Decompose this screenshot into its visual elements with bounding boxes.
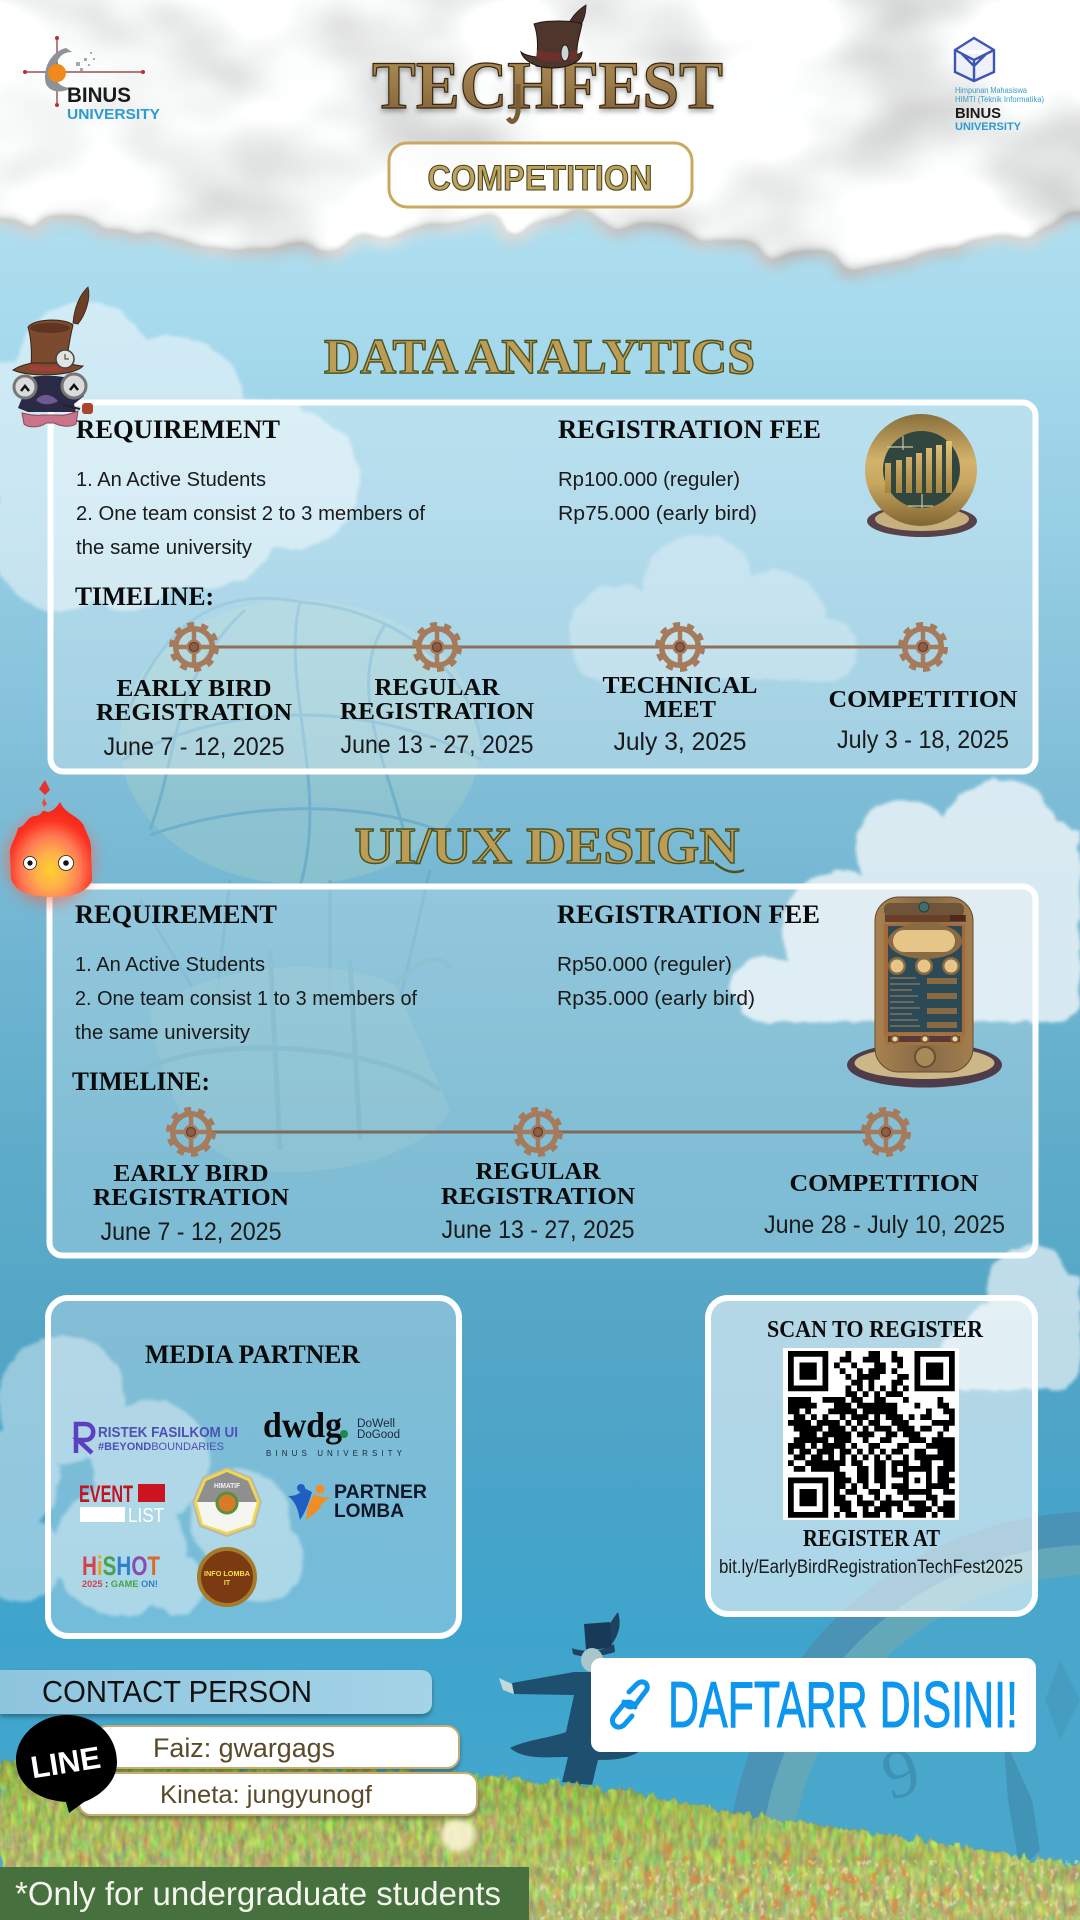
requirement heading: REQUIREMENT	[75, 900, 277, 929]
cloud: right side mid	[732, 780, 1080, 1025]
milestone: technical meet: TECHNICAL	[602, 673, 758, 699]
QR code	[783, 1348, 959, 1520]
panel: QR registration	[708, 1298, 1035, 1614]
logo: Partner Lomba	[288, 1482, 427, 1522]
milestone: regular: REGULAR	[476, 1159, 601, 1185]
logo: Event List: LIST	[128, 1505, 164, 1527]
icon: gold bar chart coin	[865, 414, 977, 537]
milestone: early bird	[93, 1161, 290, 1246]
cloud: behind first panel left	[0, 302, 360, 610]
panel: UI/UX Design	[50, 886, 1036, 1256]
clock tower ghost: 9	[874, 1732, 928, 1815]
logo: Hishot: 2025 : GAME ON!	[82, 1579, 158, 1589]
logo: dwdg DoWell DoGood: BINUS UNIVERSITY	[266, 1449, 403, 1458]
milestone: early bird: EARLY BIRD	[114, 1161, 268, 1187]
milestone: early bird: REGISTRATION	[93, 1185, 290, 1211]
pill: Faiz contact: Faiz: gwargags	[153, 1733, 335, 1763]
logo: HIMTI: Himpunan Mahasiswa	[955, 86, 1028, 95]
milestone: technical meet	[602, 673, 758, 756]
registration fee amounts: Rp100.000 (reguler)	[558, 468, 740, 491]
milestone: regular: REGULAR	[374, 675, 500, 701]
milestone: regular: REGISTRATION	[441, 1184, 636, 1210]
requirement list: 2. One team consist 2 to 3 members of	[76, 502, 425, 525]
logo: Ristek Fasilkom UI	[76, 1424, 238, 1453]
scarecrow figure	[499, 1612, 644, 1810]
registration fee heading: REGISTRATION FEE	[557, 900, 820, 929]
panel: media partner	[48, 1298, 459, 1636]
bar: contact person: CONTACT PERSON	[42, 1674, 312, 1709]
logo: Info Lomba IT	[199, 1549, 255, 1605]
cloud: lower left behind media panel	[0, 1336, 304, 1616]
timeline heading: TIMELINE:	[75, 582, 214, 611]
registration fee heading: REGISTRATION FEE	[558, 415, 821, 444]
logo: BINUS University: BINUS	[67, 84, 131, 107]
requirement list: 1. An Active Students	[76, 468, 266, 491]
timeline line	[194, 646, 923, 648]
logo: Info Lomba IT: INFO LOMBA	[204, 1569, 251, 1578]
flower glow in grass	[441, 1818, 475, 1852]
logo: Himatif badge	[193, 1468, 261, 1536]
grassy hill	[0, 1762, 1080, 1920]
logo: Info Lomba IT: IT	[224, 1580, 231, 1587]
milestone: regular: June 13 - 27, 2025	[442, 1216, 634, 1244]
milestone: early bird: June 7 - 12, 2025	[104, 733, 284, 761]
logo: Himatif badge: HIMATIF	[214, 1483, 241, 1490]
balloon airship ghost	[120, 598, 482, 1172]
icon: LINE speech bubble	[16, 1715, 117, 1813]
logo: HIMTI: UNIVERSITY	[955, 121, 1022, 133]
milestone: early bird: REGISTRATION	[96, 700, 293, 726]
milestone: regular: June 13 - 27, 2025	[340, 731, 534, 759]
timeline line	[191, 1130, 886, 1134]
logo: Event List: EVENT	[79, 1481, 133, 1508]
registration fee amounts	[557, 953, 755, 1010]
logo: BINUS University	[23, 36, 160, 123]
character: Calcifer flame	[6, 780, 94, 904]
registration fee amounts: Rp35.000 (early bird)	[557, 987, 755, 1010]
requirement list	[75, 953, 417, 1044]
gear: competition	[864, 1110, 908, 1154]
milestone: early bird: June 7 - 12, 2025	[100, 1218, 282, 1246]
gear: competition	[900, 624, 946, 670]
milestone: competition: July 3 - 18, 2025	[837, 726, 1009, 754]
registration link: bit.ly/EarlyBirdRegistrationTechFest2025	[719, 1557, 1023, 1578]
icon: link	[612, 1682, 647, 1727]
logo: dwdg DoWell DoGood: DoGood	[357, 1429, 400, 1441]
gear: early bird	[172, 624, 216, 670]
character: crow with top hat	[13, 287, 93, 427]
gear: technical meet	[658, 624, 702, 670]
cloud: behind first panel right	[570, 534, 857, 685]
icon: top hat on title	[521, 5, 586, 68]
gear: regular	[414, 624, 460, 670]
milestone: regular: REGISTRATION	[340, 699, 535, 725]
logo: Partner Lomba: PARTNER	[334, 1482, 427, 1503]
registration fee amounts: Rp50.000 (reguler)	[557, 953, 732, 976]
requirement list	[76, 468, 425, 559]
milestone: technical meet: MEET	[644, 697, 716, 723]
icon: steampunk phone	[847, 897, 1002, 1088]
logo: dwdg DoWell DoGood: dwdg	[263, 1405, 342, 1445]
logo: Hishot: HiSHOT	[82, 1551, 160, 1581]
icon: LINE speech bubble: LINE	[28, 1740, 103, 1785]
top cloud bank	[0, 0, 1080, 272]
milestone: regular	[441, 1159, 636, 1244]
gear: regular	[516, 1110, 560, 1154]
pill: Kineta contact	[79, 1773, 477, 1815]
requirement heading: REQUIREMENT	[76, 415, 280, 444]
requirement list: 2. One team consist 1 to 3 members of	[75, 987, 417, 1010]
panel: Data Analytics	[50, 402, 1036, 772]
scan heading: SCAN TO REGISTER	[767, 1317, 984, 1343]
cloud: right edge behind QR panel	[940, 1246, 1080, 1390]
note bar: undergraduate only: *Only for undergraduate students	[15, 1875, 501, 1912]
registration fee amounts: Rp75.000 (early bird)	[558, 502, 757, 525]
milestone: competition: COMPETITION	[790, 1171, 979, 1197]
milestone: competition	[828, 687, 1018, 754]
logo: Ristek Fasilkom UI: RISTEK FASILKOM UI	[98, 1424, 238, 1441]
milestone: regular	[340, 675, 535, 759]
heading: DATA ANALYTICS: DATA ANALYTICS	[324, 328, 755, 384]
badge: COMPETITION	[389, 143, 692, 207]
milestone: competition: COMPETITION	[828, 687, 1018, 713]
heading: UI/UX DESIGN: UI/UX DESIGN	[354, 818, 740, 875]
clock tower ghost	[727, 1512, 1080, 1920]
note bar: undergraduate only	[0, 1867, 529, 1920]
logo: HIMTI: BINUS	[955, 105, 1001, 122]
requirement list: the same university	[75, 1021, 251, 1044]
logo: dwdg DoWell DoGood	[263, 1405, 403, 1458]
media partner heading: MEDIA PARTNER	[145, 1340, 360, 1369]
bar: contact person	[0, 1670, 432, 1714]
milestone: early bird: EARLY BIRD	[116, 676, 272, 702]
badge: COMPETITION: COMPETITION	[428, 159, 652, 198]
milestone: technical meet: July 3, 2025	[614, 728, 746, 756]
title: TECHFEST: TECHFEST	[372, 47, 723, 123]
gear: early bird	[168, 1110, 214, 1154]
pill: Kineta contact: Kineta: jungyunogf	[160, 1781, 372, 1809]
registration fee amounts	[558, 468, 757, 525]
logo: HIMTI	[955, 38, 1044, 133]
requirement list: the same university	[76, 536, 253, 559]
logo: Partner Lomba: LOMBA	[334, 1501, 404, 1522]
milestone: competition: June 28 - July 10, 2025	[764, 1211, 1005, 1239]
register at heading: REGISTER AT	[803, 1526, 940, 1552]
logo: dwdg DoWell DoGood: DoWell	[357, 1418, 395, 1430]
requirement list: 1. An Active Students	[75, 953, 265, 976]
pill: Faiz contact	[95, 1726, 459, 1768]
milestone: competition	[764, 1171, 1005, 1239]
logo: Ristek Fasilkom UI: #BEYONDBOUNDARIES	[98, 1441, 224, 1453]
button: daftar disini	[591, 1658, 1036, 1752]
timeline heading: TIMELINE:	[72, 1067, 210, 1096]
logo: Event List	[79, 1481, 165, 1527]
milestone: early bird	[96, 676, 293, 761]
logo: HIMTI: HIMTI (Teknik Informatika)	[955, 95, 1044, 104]
logo: BINUS University: UNIVERSITY	[67, 106, 160, 123]
